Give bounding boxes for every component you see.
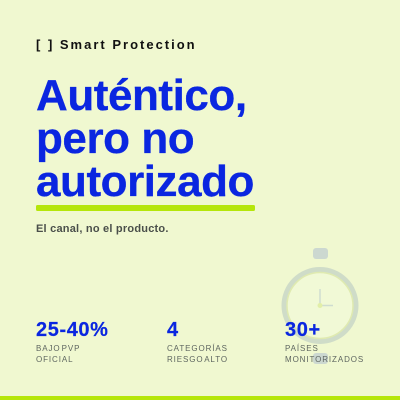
title: Auténtico, xyxy=(36,71,247,120)
stat: categories: CATEGORÍAS xyxy=(167,344,228,353)
stat: discount: OFICIAL xyxy=(36,355,73,364)
title underline xyxy=(36,205,255,211)
title xyxy=(36,71,254,206)
bottom accent bar xyxy=(0,396,400,400)
stat: discount: 25-40% xyxy=(36,319,109,341)
brand tag: [ ] Smart Protection xyxy=(36,37,197,52)
stat: countries: MONITORIZADOS xyxy=(285,355,364,364)
stat: countries: 30+ xyxy=(285,319,321,341)
title: pero no xyxy=(36,114,194,163)
stat: countries: PAÍSES xyxy=(285,344,319,353)
stat: countries xyxy=(285,319,364,364)
stat: categories xyxy=(167,319,228,364)
stat: discount xyxy=(36,319,109,364)
title: autorizado xyxy=(36,157,254,206)
stat: categories: RIESGO ALTO xyxy=(167,355,228,364)
stat: discount: BAJO PVP xyxy=(36,344,80,353)
stat: categories: 4 xyxy=(167,319,179,341)
icon: stopwatch watermark xyxy=(282,248,358,364)
subtitle: El canal, no el producto. xyxy=(36,223,169,235)
